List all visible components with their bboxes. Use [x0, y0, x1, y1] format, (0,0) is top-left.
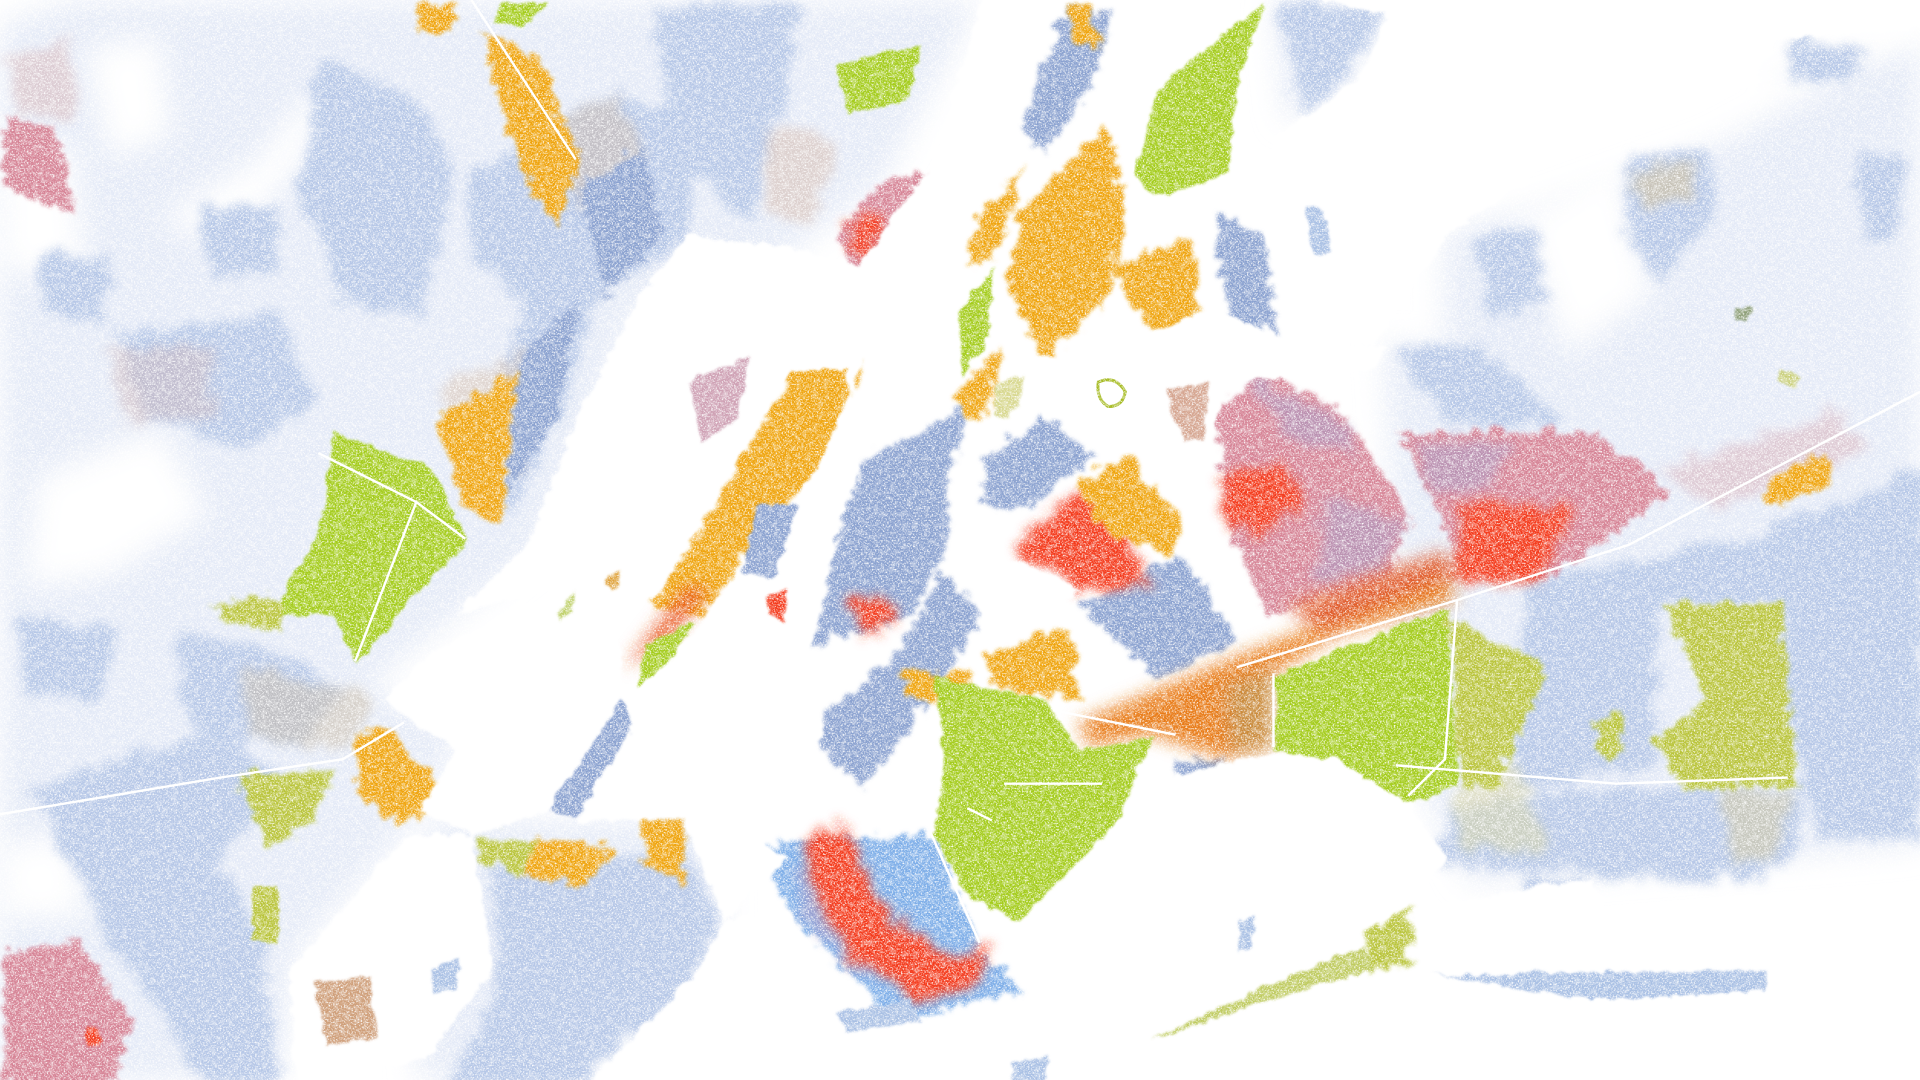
map region: pink and red neighbourhoods [0, 110, 1665, 1080]
map region: blue toned mixing over pink Queens [790, 380, 1506, 967]
map details: islands and fragments drawn over the water [83, 202, 1800, 1078]
map region: orange and red diagonal band through Brooklyn and Queens [624, 551, 1457, 759]
map region: grey blue mixed neighbourhoods [502, 0, 1273, 808]
map region: red hot spots [796, 208, 1567, 994]
map region: strong blue south Brooklyn [759, 833, 1022, 1016]
map region: olive mixed neighbourhoods [208, 594, 1794, 967]
map region: tan and mauve mixed suburbs [0, 37, 1861, 857]
icon-like park loop in the East River [1098, 380, 1125, 407]
map region: yellow green neighbourhoods [269, 0, 1457, 918]
map region: orange neighbourhoods [349, 0, 1824, 882]
map region: Rockaway and barrier beach strip [833, 967, 1763, 1029]
